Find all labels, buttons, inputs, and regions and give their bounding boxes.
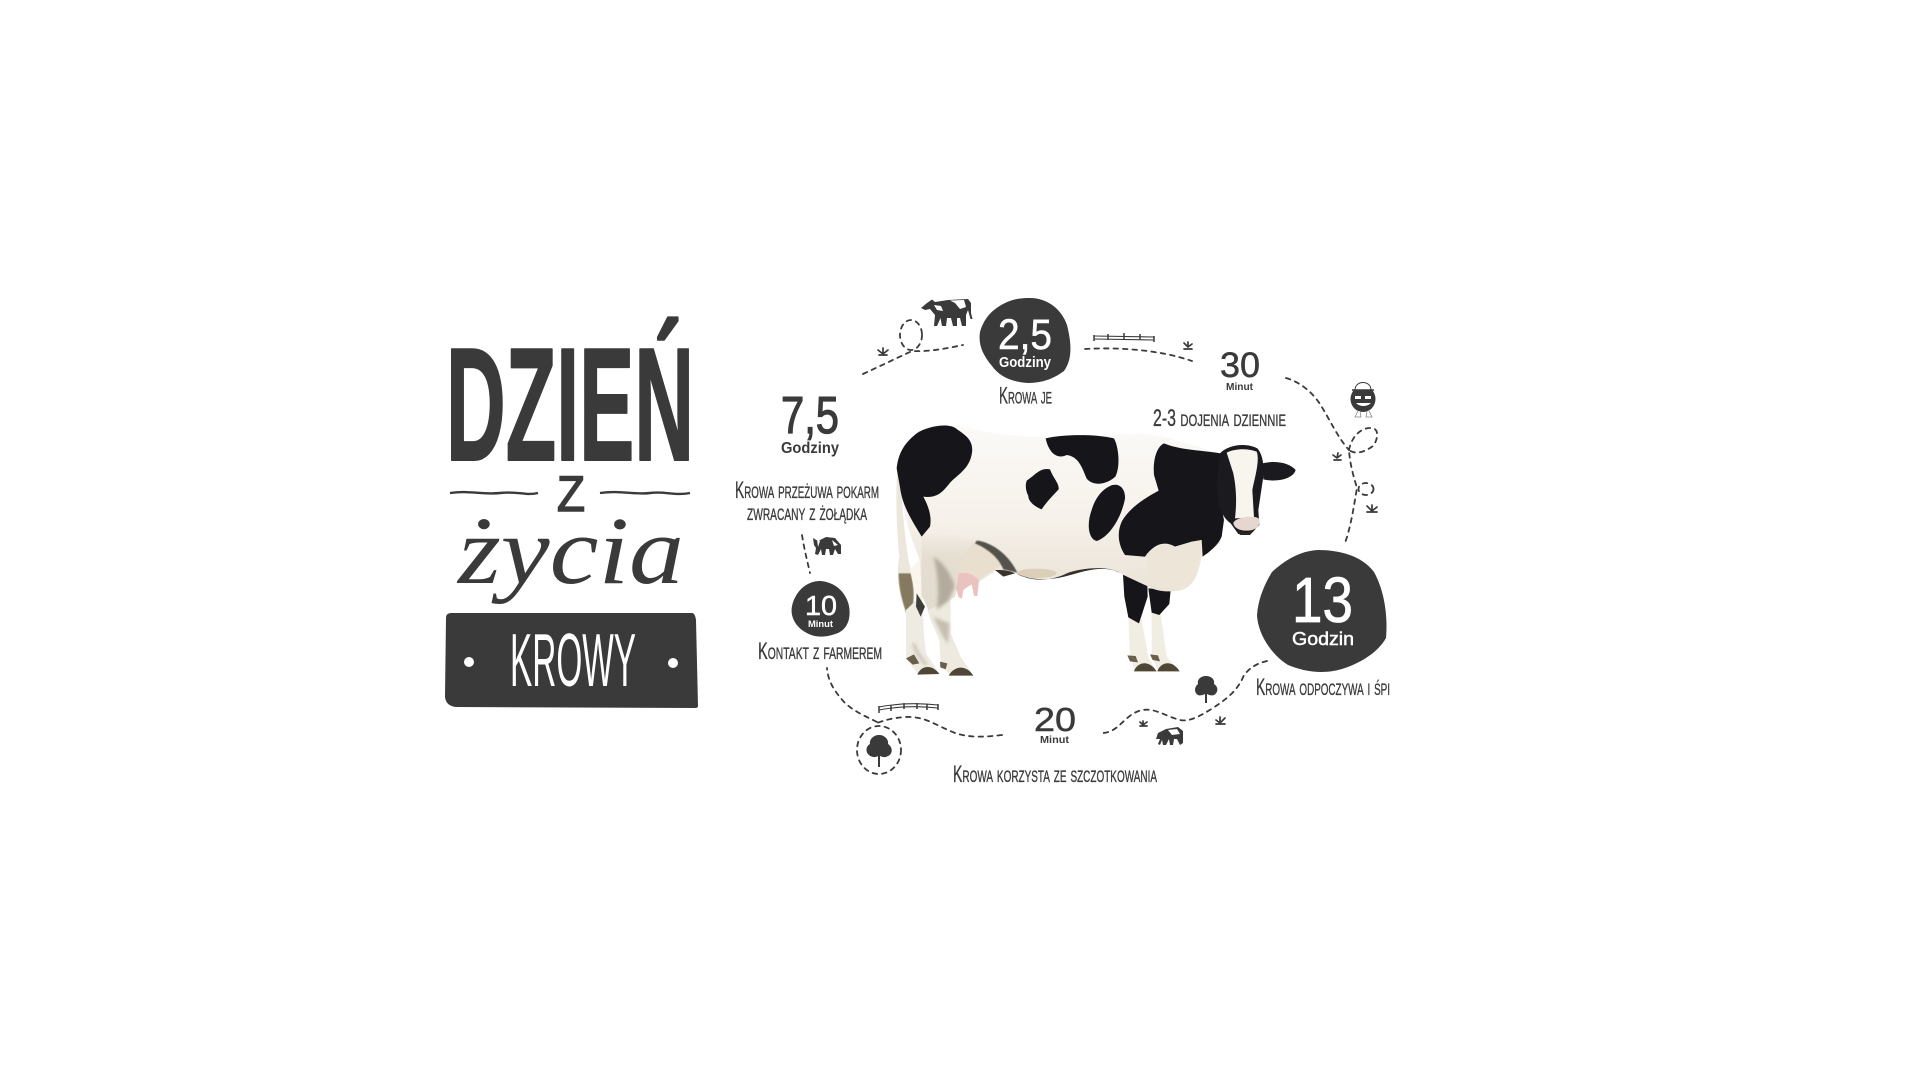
cow black patch: rump <box>897 426 972 537</box>
wavy divider left <box>450 492 538 494</box>
cow black patch: oval <box>1089 485 1125 541</box>
icon: grass tufts <box>878 342 1377 726</box>
icon: fence bottom <box>879 703 938 713</box>
icon: tree in circle <box>866 735 892 767</box>
unit: Minut <box>1040 734 1070 746</box>
cow brisket <box>1147 540 1202 591</box>
cow black patch: back <box>1046 435 1119 484</box>
cow tail <box>896 468 914 614</box>
icon: cow top <box>921 299 972 326</box>
unit: Godzin <box>1292 628 1354 649</box>
icon: fence top <box>1094 333 1154 342</box>
unit: Minut <box>1226 382 1254 393</box>
unit: Godziny <box>999 355 1051 371</box>
caption line 2: zwracany z żołądka <box>747 499 867 526</box>
caption: 2-3 dojenia dziennie <box>1153 405 1286 432</box>
caption line 1: Krowa przeżuwa pokarm <box>735 477 879 504</box>
cow inner hind shading <box>910 557 923 607</box>
caption: Krowa odpoczywa i śpi <box>1256 674 1390 701</box>
value: 2,5 <box>998 311 1052 359</box>
blob <box>980 298 1070 383</box>
title badge: krowy: KROWY <box>510 618 636 702</box>
wavy divider right <box>600 492 690 494</box>
stat: 13 godzin, odpoczynek <box>1256 550 1390 701</box>
cow black patch: flank <box>1026 469 1059 509</box>
value: 20 <box>1034 701 1076 738</box>
stat: 2,5 godziny, krowa je <box>980 298 1070 410</box>
value: 7,5 <box>781 387 839 445</box>
value: 10 <box>805 590 837 621</box>
title: z: Z <box>557 466 585 522</box>
caption: Krowa je <box>999 382 1052 410</box>
cow body <box>899 424 1223 610</box>
cow photo illustration <box>896 424 1296 676</box>
title: życia: życia <box>456 497 684 604</box>
stat: 30 minut, dojenia <box>1153 346 1286 432</box>
value: 13 <box>1292 564 1353 636</box>
cow front legs <box>1122 553 1180 671</box>
icon: farmer <box>1350 382 1376 417</box>
stat: 10 minut, kontakt <box>758 581 882 665</box>
title block <box>445 315 698 708</box>
cow hind legs <box>906 593 973 676</box>
value: 30 <box>1220 346 1260 385</box>
cow hip and thigh <box>922 533 975 610</box>
stat: 20 minut, szczotkowanie <box>953 701 1157 788</box>
cow black patch: shoulder and neck <box>1119 443 1224 557</box>
stat: 7,5 godziny, przeżuwanie <box>735 387 879 526</box>
caption: Kontakt z farmerem <box>758 638 882 665</box>
cow ear <box>1263 462 1296 480</box>
icon: cow grazing bottom <box>1156 727 1183 745</box>
caption: Krowa korzysta ze szczotkowania <box>953 761 1157 788</box>
title: Dzień: DZIEŃ <box>446 315 694 495</box>
icon: tree <box>1195 676 1217 703</box>
cow udder <box>956 541 1120 599</box>
blob <box>792 581 850 637</box>
blob <box>1257 550 1386 672</box>
unit: Minut <box>808 619 834 630</box>
cow hip dirt <box>933 557 955 610</box>
title badge: krowy <box>445 613 698 708</box>
icon: cow grazing left <box>813 537 841 555</box>
dashed route <box>802 320 1377 774</box>
cow head <box>1217 445 1264 535</box>
unit: Godziny <box>781 440 839 457</box>
